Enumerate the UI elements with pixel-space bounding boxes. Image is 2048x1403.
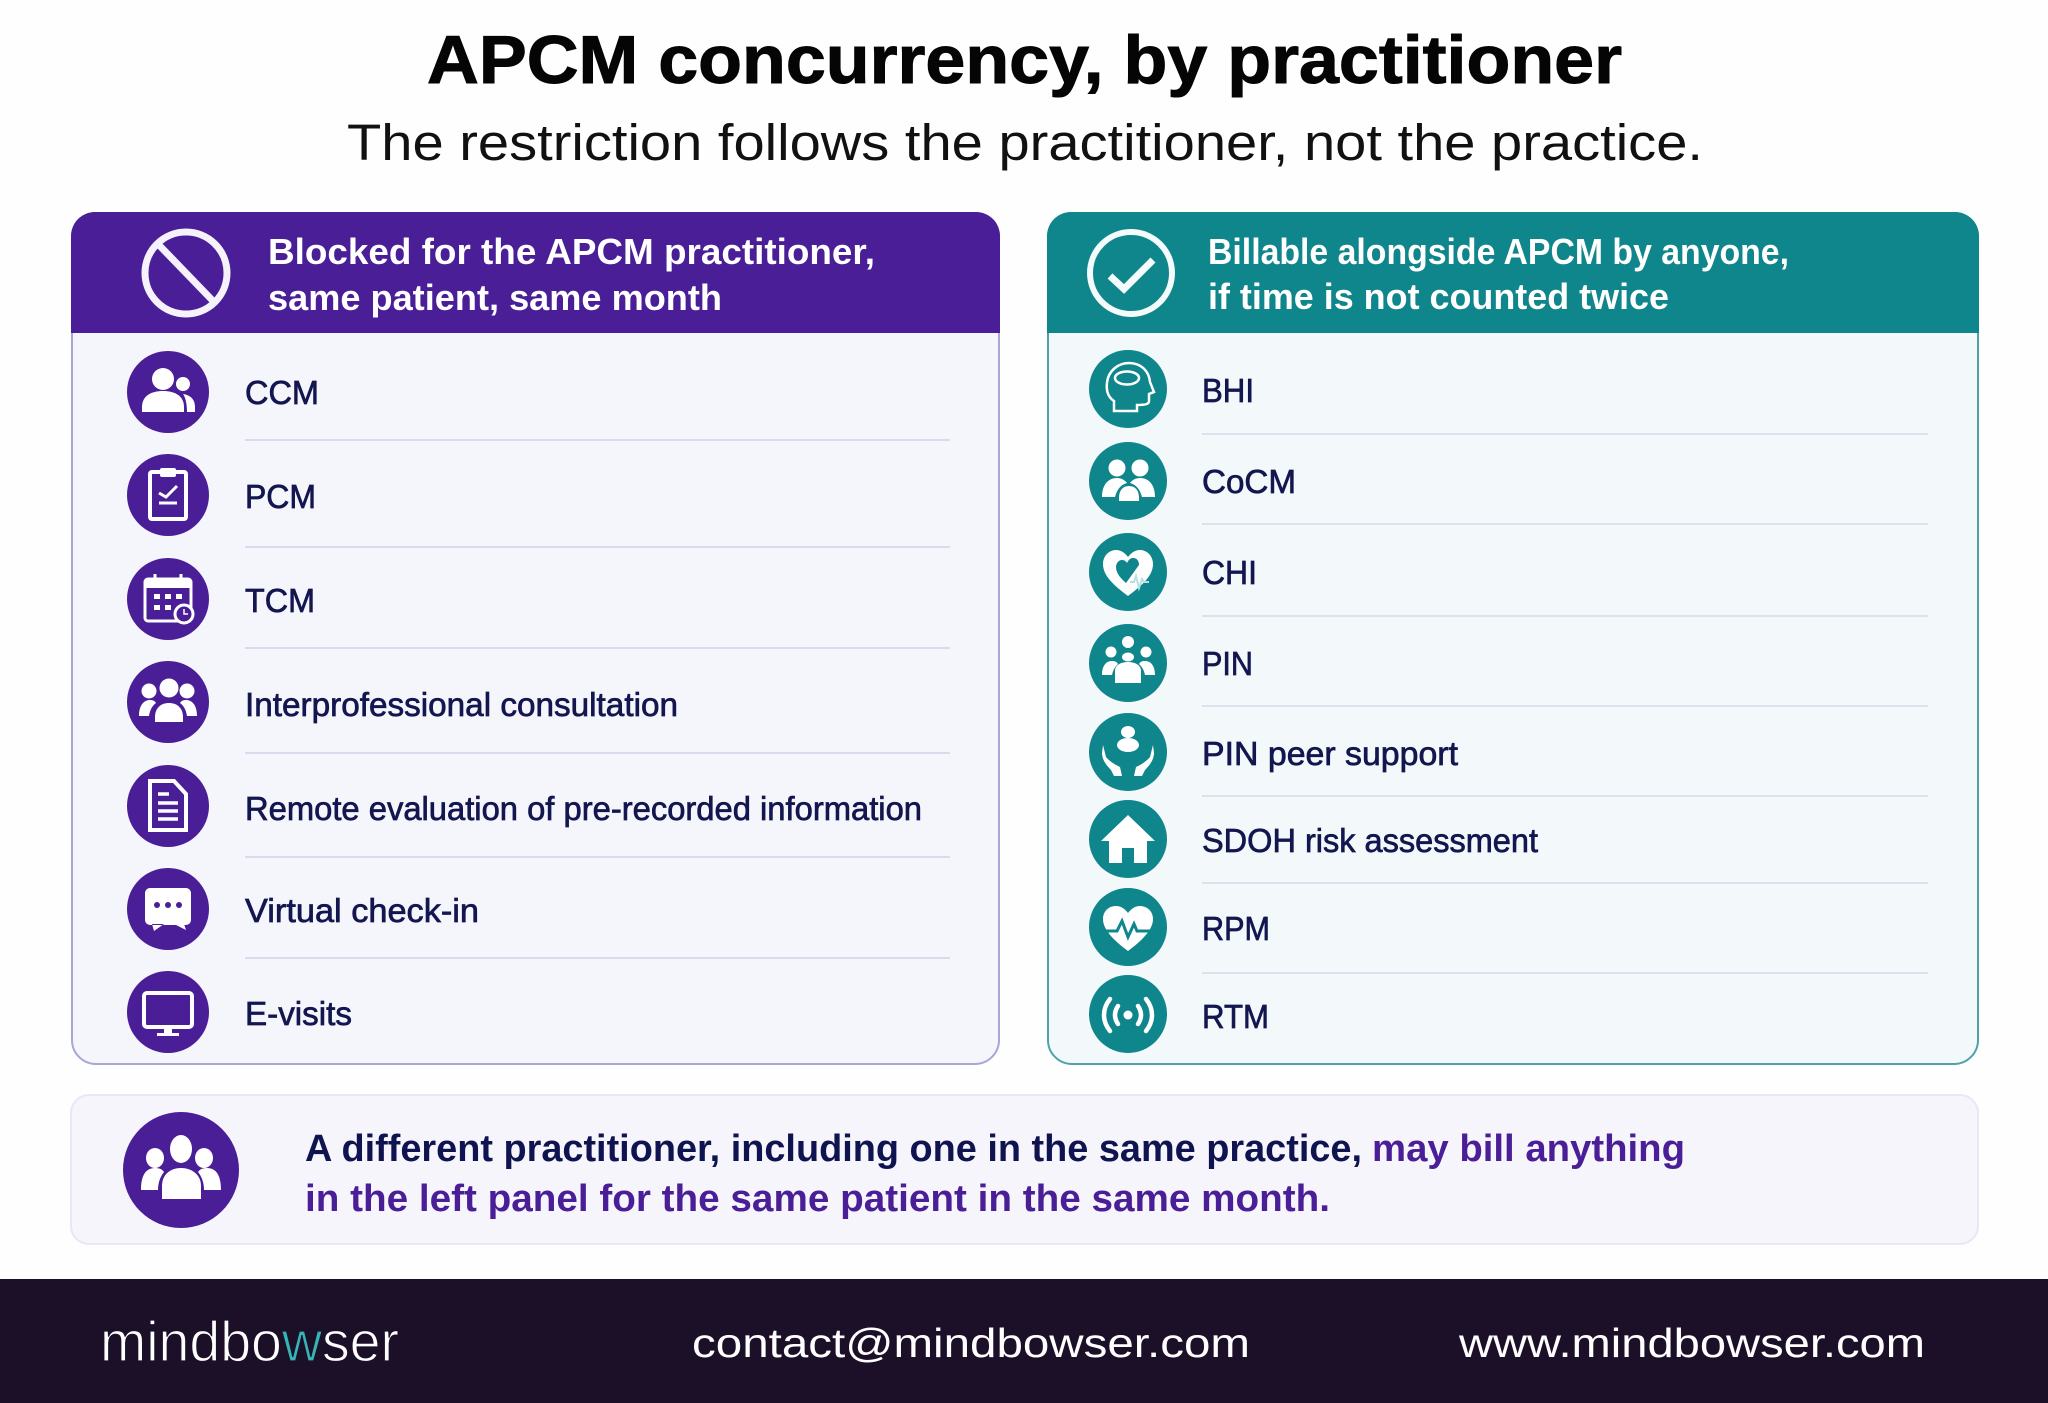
left panel heading: Blocked for the APCM practitioner, — [268, 231, 875, 272]
item: RTM — [1089, 975, 1269, 1053]
item: Interprofessional consultation — [127, 661, 678, 743]
left panel header bar — [71, 212, 1000, 333]
item: Interprofessional consultation: Interprofessional consultation — [245, 686, 678, 723]
item: BHI — [1089, 350, 1254, 428]
right panel heading: if time is not counted twice — [1208, 276, 1669, 317]
item: CCM — [127, 351, 319, 433]
item: PIN peer support — [1089, 713, 1458, 791]
website: www.mindbowser.com — [1458, 1320, 1925, 1366]
item: E-visits: E-visits — [245, 995, 352, 1032]
item: CHI: CHI — [1202, 554, 1257, 591]
left panel heading — [268, 231, 875, 318]
panel: billable alongside APCM — [1047, 212, 1979, 1064]
item: RTM: RTM — [1202, 998, 1269, 1035]
callout text: in the left panel for the same patient in the same month. — [305, 1178, 1330, 1220]
item: TCM — [127, 558, 315, 640]
item: PCM: PCM — [245, 478, 316, 515]
callout text: A different practitioner, including one in the same practice, — [305, 1128, 1362, 1170]
item: RPM — [1089, 888, 1270, 966]
icon: group of three people — [123, 1112, 239, 1228]
contact email: contact@mindbowser.com — [692, 1320, 1250, 1366]
callout text: may bill anything — [1372, 1128, 1685, 1170]
item: PIN peer support: PIN peer support — [1202, 735, 1458, 772]
icon: prohibited sign — [145, 232, 227, 314]
item: CCM: CCM — [245, 374, 319, 411]
item: Remote evaluation of pre-recorded information — [127, 765, 922, 847]
logo: mindbowser: mindbowser — [100, 1310, 399, 1374]
footer bar — [0, 1279, 2048, 1403]
item: Virtual check-in: Virtual check-in — [245, 892, 479, 929]
callout: different practitioner — [71, 1095, 1978, 1244]
item: E-visits — [127, 971, 352, 1053]
panel: blocked for the APCM practitioner — [71, 212, 1000, 1064]
item: BHI: BHI — [1202, 372, 1254, 409]
item: PCM — [127, 454, 316, 536]
left panel heading: same patient, same month — [268, 277, 722, 318]
item: CHI — [1089, 533, 1257, 611]
item: RPM: RPM — [1202, 910, 1270, 947]
icon: check mark — [1090, 232, 1172, 314]
title: APCM concurrency, by practitioner — [427, 22, 1622, 98]
subtitle: The restriction follows the practitioner, not the practice. — [347, 114, 1703, 171]
item: Virtual check-in — [127, 868, 479, 950]
right panel header bar — [1047, 212, 1979, 333]
item: SDOH risk assessment — [1089, 800, 1538, 878]
item: CoCM — [1089, 442, 1296, 520]
right panel heading — [1208, 231, 1789, 317]
callout text — [305, 1128, 1685, 1220]
item: TCM: TCM — [245, 582, 315, 619]
item: PIN — [1089, 624, 1253, 702]
right panel heading: Billable alongside APCM by anyone, — [1208, 231, 1789, 272]
item: CoCM: CoCM — [1202, 463, 1296, 500]
item: PIN: PIN — [1202, 645, 1253, 682]
item: SDOH risk assessment: SDOH risk assessment — [1202, 822, 1538, 859]
item: Remote evaluation of pre-recorded information: Remote evaluation of pre-recorded information — [245, 790, 922, 827]
